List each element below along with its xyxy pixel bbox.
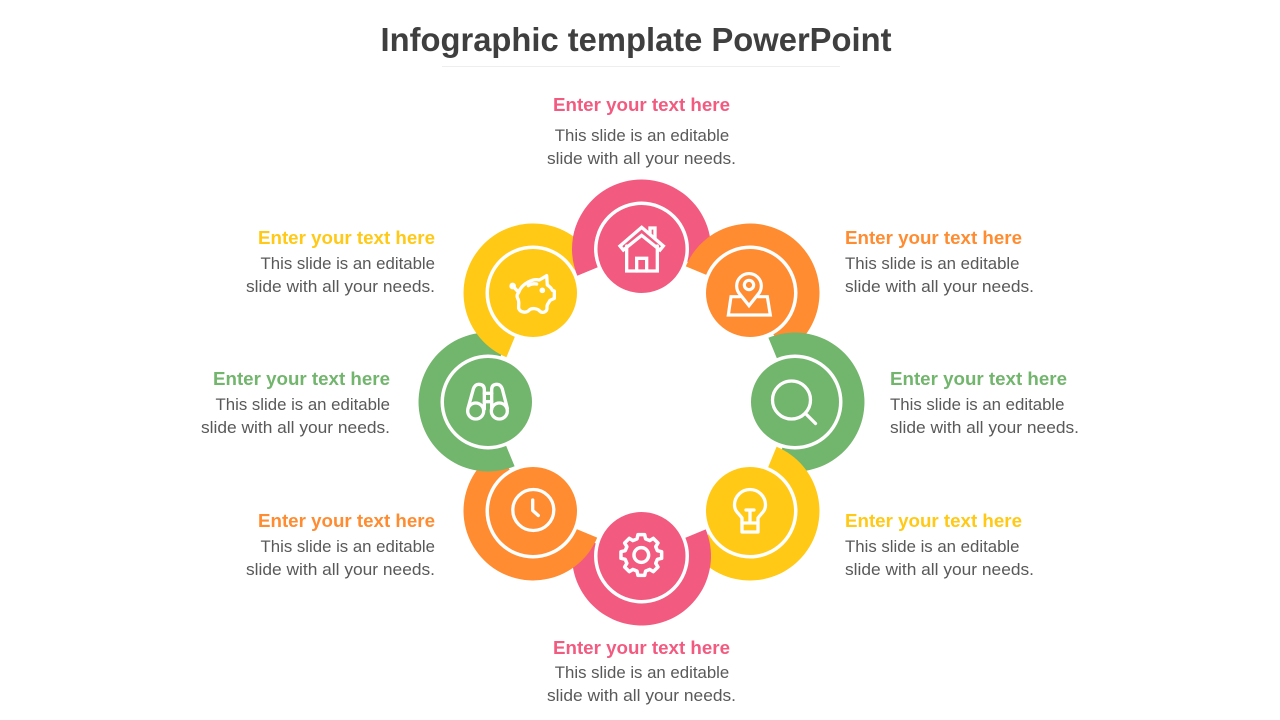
text block: top right: Enter your text here	[845, 227, 1022, 248]
icon: piggy bank	[511, 276, 554, 312]
text block: bottom left: slide with all your needs.	[246, 560, 435, 579]
text block: bottom right: This slide is an editable	[845, 537, 1020, 556]
text block: right: This slide is an editable	[890, 395, 1064, 414]
text block: bottom right: slide with all your needs.	[845, 560, 1034, 579]
text block: bottom: slide with all your needs.	[547, 686, 736, 705]
text block: right: Enter your text here	[890, 368, 1067, 389]
pink top arc tip overlapping yellow	[572, 225, 598, 276]
text block: left: This slide is an editable	[216, 395, 390, 414]
text block: bottom right: Enter your text here	[845, 510, 1022, 531]
segment: pink top with house icon	[572, 180, 711, 295]
segment: orange bottom left with clock icon	[435, 443, 601, 609]
text block: right: slide with all your needs.	[890, 418, 1079, 437]
segment: orange top right with map pin icon	[682, 195, 848, 361]
text block: top: This slide is an editable	[555, 126, 729, 145]
icon: gear	[621, 535, 662, 575]
segment: yellow top left with piggy bank icon	[435, 195, 601, 361]
text block: top right: This slide is an editable	[845, 254, 1020, 273]
title: Infographic template PowerPoint	[380, 21, 892, 58]
text block: top left	[246, 227, 435, 296]
text block: top left: This slide is an editable	[260, 254, 435, 273]
text block: top	[547, 94, 736, 168]
text block: top left: slide with all your needs.	[246, 277, 435, 296]
text block: bottom	[547, 637, 736, 705]
text block: bottom: Enter your text here	[553, 637, 730, 658]
text block: right	[890, 368, 1079, 437]
text block: left: slide with all your needs.	[201, 418, 390, 437]
text block: left	[201, 368, 390, 437]
text block: top right: slide with all your needs.	[845, 277, 1034, 296]
text block: top: slide with all your needs.	[547, 149, 736, 168]
text block: bottom right	[845, 510, 1034, 579]
text block: bottom left: This slide is an editable	[260, 537, 435, 556]
segment: green right with magnifier icon	[749, 333, 864, 472]
icon: map pin	[728, 274, 770, 315]
icon: magnifier	[772, 381, 816, 424]
segment: yellow bottom right with light bulb icon	[682, 443, 848, 609]
text block: top left: Enter your text here	[258, 227, 435, 248]
segment: green left with binoculars icon	[419, 332, 534, 471]
text block: bottom: This slide is an editable	[555, 663, 729, 682]
text block: top: Enter your text here	[553, 94, 730, 115]
icon: light bulb	[734, 489, 766, 532]
icon: house	[620, 227, 663, 271]
segment: pink bottom with gear icon	[572, 510, 711, 625]
text block: bottom left: Enter your text here	[258, 510, 435, 531]
icon: clock	[513, 490, 554, 530]
text block: bottom left	[246, 510, 435, 579]
text block: left: Enter your text here	[213, 368, 390, 389]
text block: top right	[845, 227, 1034, 296]
icon: binoculars	[468, 384, 507, 419]
